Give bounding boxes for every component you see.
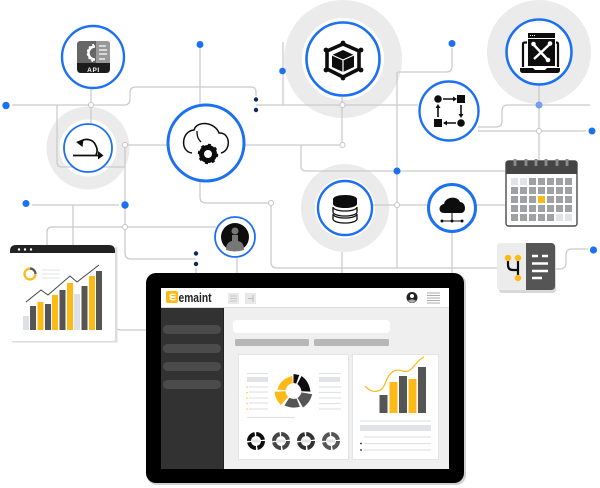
api circle [62,26,124,88]
chart window [10,245,118,342]
connector lines [12,42,590,330]
white junction nodes [88,102,542,230]
header bar: emaint [178,291,212,305]
calendar [506,159,577,226]
database circle [318,181,372,235]
bar chart panel [352,354,438,460]
dark connector dots [194,97,258,266]
gray halo rings [53,9,582,245]
laptop tools circle [506,20,572,84]
api circle: API [87,67,100,74]
tablet [146,273,466,485]
cloud gear circle [168,105,244,181]
person circle [215,217,255,257]
blue connector dots [2,40,597,254]
git branch card [497,243,556,293]
flow circle [420,82,478,140]
donut panel [238,354,348,460]
header bar [161,288,449,308]
scrum circle [64,124,112,172]
sidebar [161,308,224,469]
cube circle [306,22,380,96]
cloud network circle [428,184,476,232]
